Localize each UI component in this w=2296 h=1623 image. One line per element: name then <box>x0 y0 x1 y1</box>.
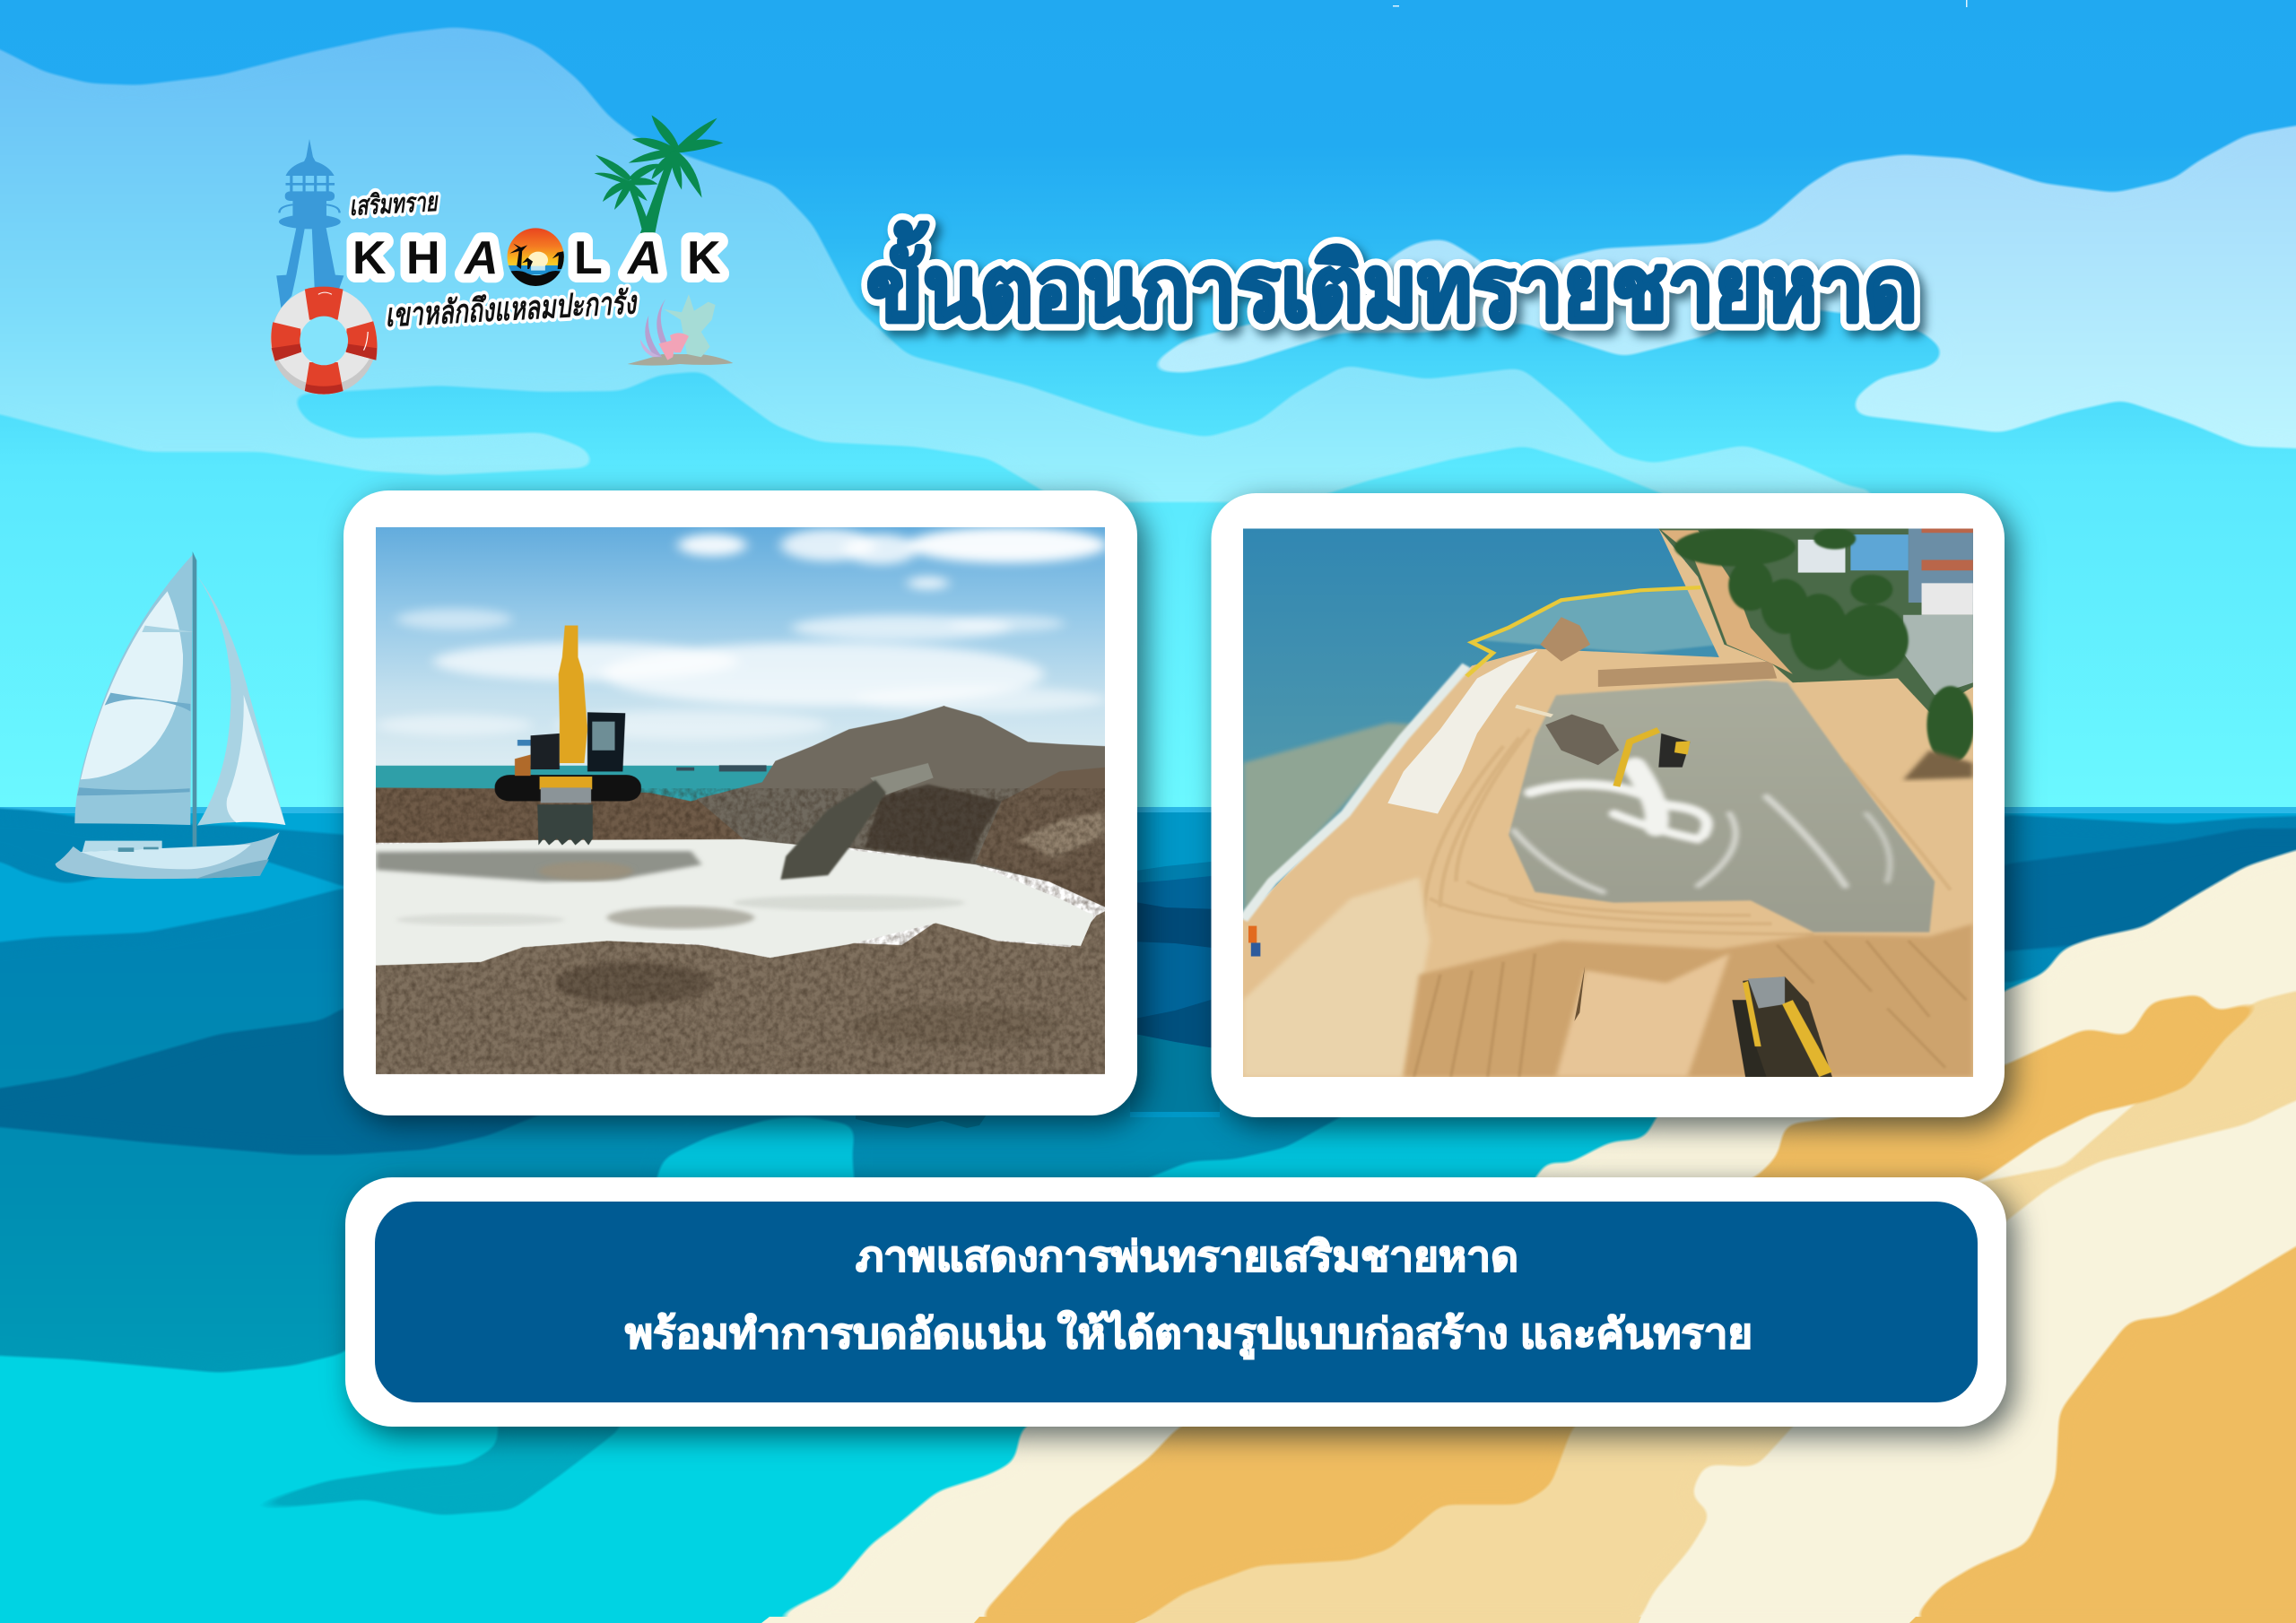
sea dark lens left <box>0 986 556 1155</box>
logo text: KHAOLAK: A <box>626 232 662 284</box>
small white marks at top edge <box>1393 0 1968 7</box>
sand streaks <box>1414 941 1966 1077</box>
water band between photos 3 <box>1130 901 1220 949</box>
buildings and trees <box>1658 528 1974 780</box>
discharge pipe and jet <box>780 763 934 880</box>
water band between photos 1 <box>1130 861 1220 1112</box>
water band between photos 5 <box>1130 1033 1220 1112</box>
icon: palm trees <box>594 115 723 233</box>
caption text line 1: ภาพแสดงการพ่นทรายเสริมชายหาด <box>856 1233 1518 1280</box>
photo: aerial view of beach nourishment pond <box>1243 529 1973 1077</box>
logo text: KHAOLAK: K <box>687 232 721 284</box>
panel: caption card <box>345 1177 2006 1427</box>
title: ขั้นตอนการเติมทรายชายหาด <box>866 221 1918 340</box>
water band between photos 2 <box>1130 875 1220 1112</box>
caption text line 2: พร้อมทำการบดอัดแน่น ให้ได้ตามรูปแบบก่อสร้าง และคันทราย <box>625 1309 1752 1359</box>
icon: coral <box>628 294 733 366</box>
logo text: subtitle: เขาหลักถึงแหลมปะการัง <box>384 283 639 334</box>
logo text: KHAOLAK <box>352 232 721 284</box>
beach bottom edge strip <box>761 1617 2296 1623</box>
tire tracks on sand <box>1424 729 1951 934</box>
logo text: KHAOLAK: K <box>352 232 387 284</box>
beach orange sand band <box>974 991 2278 1623</box>
logo: Khao Lak sand nourishment <box>271 115 733 395</box>
excavator in foreground <box>1732 976 1832 1077</box>
pale cloud wave upper right <box>1144 112 2296 453</box>
slurry water and foam <box>376 839 1094 966</box>
logo text: small heading: เสริมทราย <box>349 187 439 221</box>
panel: photo 1 card <box>344 490 1137 1115</box>
logo text: KHAOLAK: L <box>574 232 603 284</box>
light blue wave upper left <box>0 0 1874 511</box>
icon: lighthouse <box>276 139 344 308</box>
sea medium layer <box>0 888 1358 1373</box>
horizon line <box>0 807 2296 813</box>
title: ขั้นตอนการเติมทรายชายหาด <box>866 221 1918 340</box>
logo text: KHAOLAK: A <box>463 232 499 284</box>
panel: photo 2 card <box>1211 493 2005 1117</box>
icon: sailboat <box>56 551 285 879</box>
sea base <box>0 812 2296 1623</box>
worker on beach <box>1248 926 1260 957</box>
sea medium band right <box>1996 947 2081 985</box>
sea bands right top <box>1996 812 2296 964</box>
dark ripple below first photo <box>856 1112 988 1128</box>
sea dark band right <box>1996 829 2296 952</box>
beach cream sand <box>761 816 2296 1623</box>
beach orange sand corner <box>1909 1166 2296 1623</box>
excavator in pond <box>1616 730 1690 786</box>
shallow patch lower sea <box>211 1399 622 1515</box>
beach tan sand <box>1135 977 2296 1623</box>
sea dark wave left top <box>0 803 359 891</box>
water band between photos 4 <box>1130 997 1220 1049</box>
background sky gradient <box>0 0 2296 816</box>
icon: life ring <box>271 287 378 395</box>
water base between photos <box>1130 812 1220 1117</box>
excavator <box>495 626 641 846</box>
icon: sunset emblem <box>506 227 567 287</box>
caption background <box>375 1202 1978 1402</box>
photo: excavator and sand slurry pipe <box>376 527 1105 1074</box>
logo text: KHAOLAK: H <box>406 232 440 284</box>
